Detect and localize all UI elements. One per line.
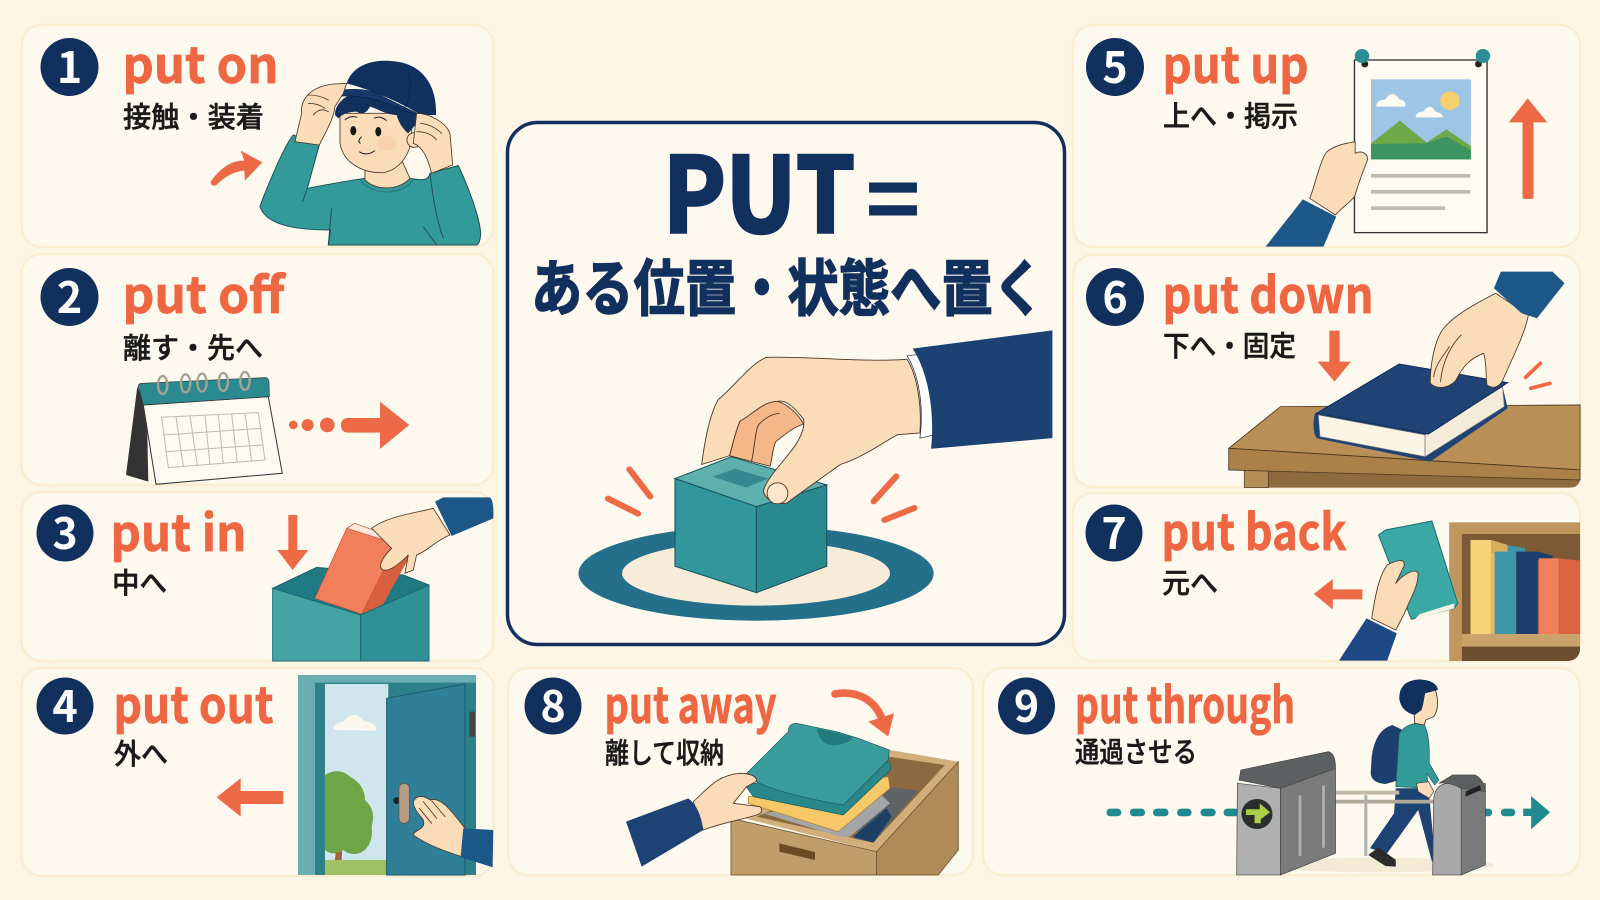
badge 7 — [1086, 500, 1142, 562]
illustration: clothes into drawer — [626, 693, 958, 875]
heading: put off: put off — [122, 256, 286, 328]
meaning: 接触・装着: 接触・装着 — [123, 102, 264, 134]
panel: central definition — [508, 113, 1064, 644]
title: PUT=: PUT — [663, 113, 855, 262]
badge 5: 5 — [1102, 34, 1128, 96]
arrow: up — [1509, 98, 1547, 199]
badge 2: 2 — [57, 264, 82, 326]
badge 4 — [36, 673, 94, 735]
arrow: curved — [211, 151, 262, 186]
heading: put out: put out — [114, 666, 274, 738]
illustration: hand placing box on target — [578, 330, 1052, 621]
illustration: ticket gate and walker — [1106, 679, 1550, 875]
illustration: bookshelf and book — [1339, 521, 1580, 661]
panel: put on — [22, 25, 494, 247]
arrow: dashed through gate — [1106, 796, 1550, 829]
heading: put away: put away — [604, 666, 777, 738]
badge 5 — [1086, 34, 1144, 96]
heading: put down: put down — [1162, 256, 1374, 328]
meaning: 外へ: 外へ — [114, 739, 168, 771]
heading: put on: put on — [122, 26, 278, 98]
illustration: open door — [298, 675, 493, 875]
illustration: desk calendar — [126, 372, 282, 484]
panel: put out — [22, 666, 494, 876]
meaning: 通過させる: 通過させる — [1075, 737, 1197, 769]
illustration: book on table — [1229, 272, 1580, 488]
meaning: 離して収納: 離して収納 — [605, 738, 724, 770]
arrow: down — [1318, 331, 1351, 382]
badge 1 — [40, 34, 98, 96]
illustration: poster pinned up — [1266, 49, 1490, 247]
illustration: book into box — [273, 497, 493, 661]
badge 9 — [998, 673, 1055, 735]
heading: put back: put back — [1162, 493, 1346, 565]
illustration: boy putting on cap — [260, 61, 481, 245]
title: PUT=: = — [866, 131, 920, 258]
meaning: 中へ: 中へ — [112, 568, 167, 600]
heading: put in: put in — [110, 494, 246, 566]
arrow: left — [217, 778, 283, 817]
panel: put in — [22, 492, 494, 661]
panel: put through — [983, 666, 1580, 875]
arrow: dots to the right — [289, 402, 409, 449]
heading: put up: put up — [1162, 26, 1308, 98]
panel: put up — [1073, 25, 1580, 247]
badge 3: 3 — [52, 500, 78, 562]
badge 8 — [524, 673, 582, 735]
arrow: curved down — [835, 693, 894, 737]
badge 6 — [1086, 264, 1144, 326]
badge 4: 4 — [52, 673, 78, 735]
panel: put off — [22, 254, 494, 485]
panel: put away — [508, 666, 973, 875]
meaning: 離す・先へ: 離す・先へ — [123, 333, 263, 365]
meaning: 下へ・固定: 下へ・固定 — [1163, 331, 1296, 363]
meaning: 上へ・掲示: 上へ・掲示 — [1163, 101, 1298, 133]
heading: put through: put through — [1075, 666, 1295, 738]
subtitle: ある位置・状態へ置く: ある位置・状態へ置く — [531, 255, 1044, 323]
badge 8: 8 — [540, 673, 566, 735]
badge 2 — [40, 264, 98, 326]
badge 3 — [36, 500, 94, 562]
panel: put back — [1073, 493, 1580, 661]
badge 9: 9 — [1014, 673, 1039, 735]
meaning: 元へ: 元へ — [1162, 568, 1218, 600]
arrow: left — [1314, 579, 1362, 609]
arrow: down — [277, 515, 308, 570]
badge 1: 1 — [57, 34, 82, 96]
panel: put down — [1073, 255, 1580, 488]
badge 6: 6 — [1102, 264, 1128, 326]
badge 7: 7 — [1101, 500, 1127, 562]
